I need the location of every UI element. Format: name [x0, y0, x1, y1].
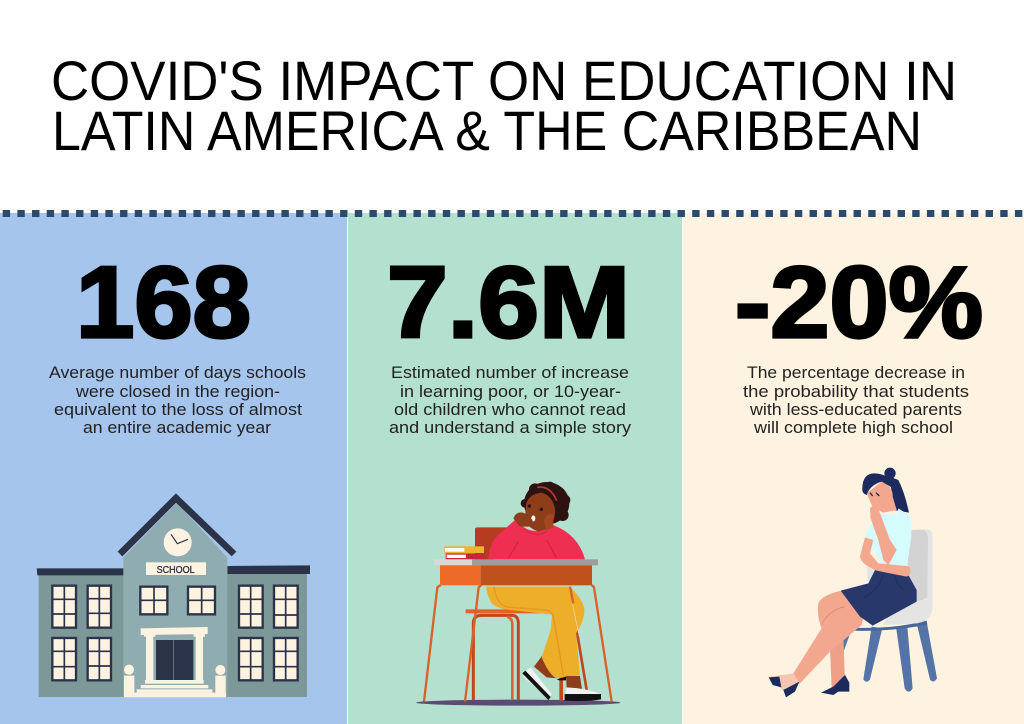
- head: [867, 482, 897, 513]
- text: -20% description: will complete high school: [753, 418, 953, 437]
- legs: [830, 633, 845, 689]
- text: 168 description: Average number of days schools: [49, 363, 306, 382]
- text: 7.6M description: old children who cannot read: [394, 400, 626, 419]
- stat: -20%: -20%: [735, 247, 983, 359]
- text: -20% description: [743, 363, 969, 437]
- icon: worried woman on chair: [769, 468, 937, 697]
- title: LATIN AMERICA & THE CARIBBEAN: [52, 99, 922, 162]
- arms: [860, 537, 910, 577]
- lower leg and far shoe: [534, 655, 557, 678]
- torso: [488, 520, 585, 559]
- text: 168 description: were closed in the region-: [75, 382, 280, 401]
- text: 7.6M description: in learning poor, or 10-year-: [400, 382, 621, 401]
- dotted divider: [3, 210, 1024, 217]
- icon: school building: [37, 498, 310, 697]
- books: [444, 546, 484, 553]
- shirt: [865, 508, 912, 568]
- hair back: [890, 477, 909, 513]
- text: 168 description: an entire academic year: [83, 418, 271, 437]
- text: 7.6M description: [389, 363, 632, 437]
- stat: 7.6M: 7.6M: [387, 247, 630, 359]
- chair back: [475, 527, 507, 560]
- text: -20% description: the probability that students: [743, 382, 969, 401]
- text: -20% description: The percentage decrease in: [747, 363, 965, 382]
- text: 7.6M description: Estimated number of increase: [391, 363, 629, 382]
- icon: school building: SCHOOL: [157, 565, 195, 576]
- trousers: [486, 587, 584, 678]
- panel: high school completion: [683, 213, 1024, 724]
- panel: learning poor: [348, 213, 682, 724]
- text: 168 description: [49, 363, 306, 437]
- title: COVID'S IMPACT ON EDUCATION IN: [51, 49, 957, 112]
- text: 7.6M description: and understand a simple story: [389, 418, 632, 437]
- desk: [472, 559, 598, 565]
- text: -20% description: with less-educated parents: [749, 400, 962, 419]
- near foot and shoe: [566, 676, 582, 689]
- stat: 168: 168: [76, 247, 251, 359]
- chair: [834, 627, 852, 673]
- icon: bored student at desk: [416, 482, 621, 706]
- panel: days schools closed: [0, 213, 347, 724]
- skirt: [841, 570, 917, 626]
- text: 168 description: equivalent to the loss of almost: [54, 400, 302, 419]
- title: [51, 49, 957, 162]
- hair and head: [513, 482, 570, 531]
